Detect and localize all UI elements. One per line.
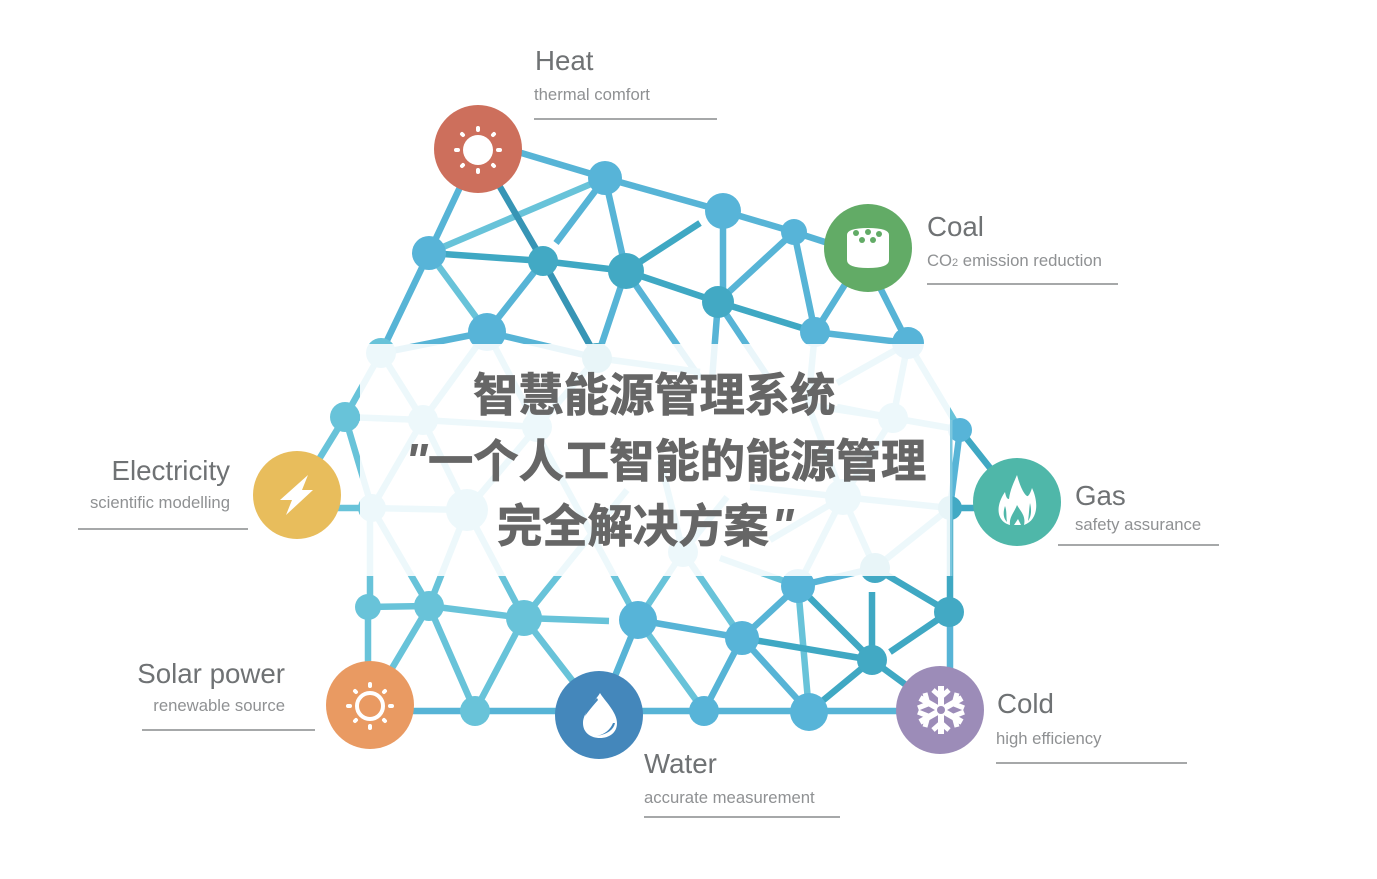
label: heat: thermal comfort bbox=[534, 85, 650, 104]
icon: gas bbox=[973, 458, 1061, 546]
label: coal: CO2 emission reduction bbox=[927, 251, 1102, 270]
label: cold: high efficiency bbox=[996, 729, 1102, 748]
title: " bbox=[405, 435, 429, 488]
title: 一个人工智能的能源管理 bbox=[428, 436, 926, 487]
label: solar power: renewable source bbox=[153, 696, 285, 715]
label: solar power: Solar power bbox=[137, 658, 285, 689]
label: gas: safety assurance bbox=[1075, 515, 1201, 534]
translucent title panel bbox=[360, 344, 950, 576]
title bbox=[405, 370, 926, 553]
label: gas: Gas bbox=[1075, 480, 1126, 511]
label: water bbox=[644, 748, 840, 817]
label: cold: Cold bbox=[997, 688, 1054, 719]
network diagram bbox=[297, 140, 1017, 731]
label: electricity bbox=[78, 455, 248, 529]
title: 完全解决方案 bbox=[497, 501, 769, 552]
label: solar power bbox=[137, 658, 315, 730]
label: coal: Coal bbox=[927, 211, 984, 242]
label: water: accurate measurement bbox=[644, 788, 815, 807]
right edge sliver bbox=[950, 420, 952, 576]
label: electricity: scientific modelling bbox=[90, 493, 230, 512]
title: " bbox=[771, 500, 795, 553]
icon: coal bbox=[824, 204, 912, 292]
icon: solar bbox=[326, 661, 414, 749]
label: heat bbox=[534, 45, 717, 119]
icon: electricity bbox=[253, 451, 341, 539]
label: electricity: Electricity bbox=[112, 455, 230, 486]
label: cold bbox=[996, 688, 1187, 763]
icon: heat bbox=[434, 105, 522, 193]
icon: water bbox=[555, 671, 643, 759]
label: gas bbox=[1058, 480, 1219, 545]
title: 智慧能源管理系统 bbox=[473, 370, 835, 421]
label: coal bbox=[927, 211, 1118, 284]
label: heat: Heat bbox=[535, 45, 594, 76]
label: water: Water bbox=[644, 748, 717, 779]
icon: cold bbox=[896, 666, 984, 754]
